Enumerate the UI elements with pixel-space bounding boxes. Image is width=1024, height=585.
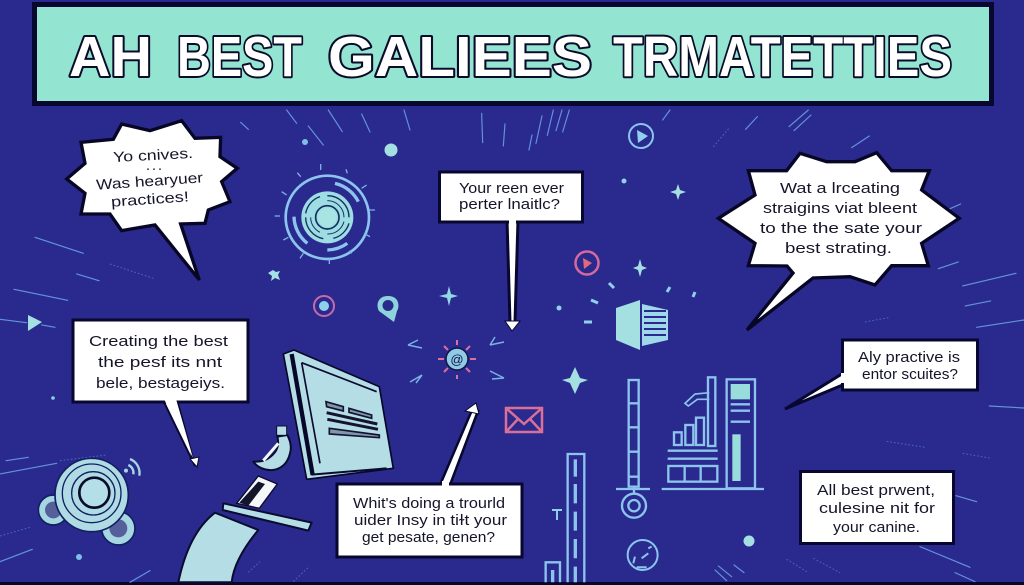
speech box: center bottom xyxy=(337,403,522,557)
speech box: right middle xyxy=(785,340,978,409)
speech bubble: top left: ... xyxy=(146,158,162,174)
speech bubble: top right xyxy=(718,153,959,330)
speech box: center bottom: uider Insy in tiɫt your xyxy=(354,513,507,529)
speech box: center bottom: Whit's doing a trourld xyxy=(353,496,505,512)
speech box: center top xyxy=(440,172,582,331)
speech bubble: top right: best strating. xyxy=(785,241,892,257)
icon: mechanical ball xyxy=(38,458,140,545)
title banner: TRMATETTIES xyxy=(613,25,952,89)
icon: smiley circle xyxy=(628,540,658,570)
speech box: right middle: entor scuites? xyxy=(862,367,958,383)
speech bubble: top left xyxy=(67,121,237,280)
title banner: BEST xyxy=(177,25,302,89)
title banner xyxy=(34,4,992,104)
icon: microscope arm xyxy=(178,426,312,582)
speech box: creating the best: bele, bestageiys. xyxy=(96,376,225,392)
speech box: creating the best: Creating the best xyxy=(89,334,228,350)
speech box: bottom right: your canine. xyxy=(833,520,920,536)
speech box: creating the best xyxy=(73,320,248,467)
speech box: center top: perter lnaitlc? xyxy=(459,197,560,213)
speech bubble: top left: Yo cnives. xyxy=(113,146,193,166)
icon: envelope xyxy=(506,408,542,432)
chart: tall road column xyxy=(546,454,584,582)
speech box: center top: Your reen ever xyxy=(459,181,564,197)
speech bubble: top right: straigins viat bleent xyxy=(763,201,917,217)
icon: concentric target xyxy=(275,164,375,264)
icon: small ring dot xyxy=(314,296,334,316)
title banner: GALIEES xyxy=(328,25,592,89)
icon: at sign badge xyxy=(408,337,504,383)
speech box: creating the best: the pesf its nnt xyxy=(98,355,222,371)
icon: document fan xyxy=(584,283,695,350)
title banner: AH xyxy=(69,25,152,89)
speech bubble: top left: practices! xyxy=(111,189,189,211)
speech box: bottom right: culesine nit for xyxy=(819,501,935,517)
speech bubble: top left: Was hearyuer xyxy=(96,170,204,194)
speech box: right middle: Aly practive is xyxy=(858,350,960,366)
icon: pin marker xyxy=(378,296,398,322)
icon: at sign badge: @ xyxy=(450,352,464,367)
speech box: bottom right: All best prwent, xyxy=(817,483,935,499)
icon: play button pink xyxy=(576,252,598,274)
speech bubble: top right: to the the sate your xyxy=(760,221,922,237)
chart: building with bars xyxy=(662,377,764,489)
speech box: center bottom: get pesate, genen? xyxy=(362,530,495,546)
speech bubble: top right: Wat a lrceating xyxy=(780,181,900,197)
speech box: bottom right xyxy=(800,472,954,544)
icon: loose dots and sparkles xyxy=(28,139,754,560)
chart: ladder tower xyxy=(616,380,650,518)
icon: play button blue xyxy=(629,124,653,148)
icon: monitor xyxy=(283,350,393,479)
